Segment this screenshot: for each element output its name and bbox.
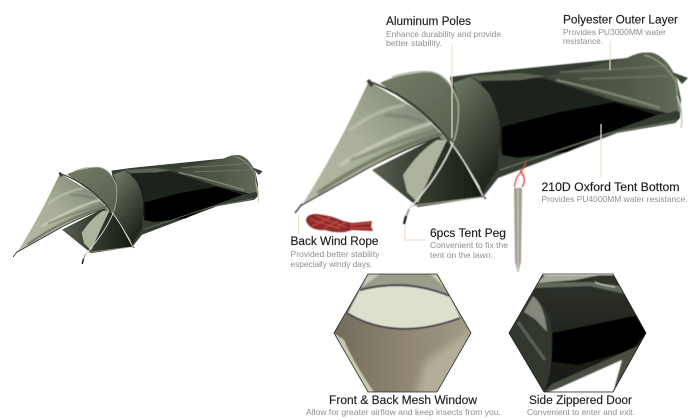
leader line: back wind rope [298, 215, 300, 235]
icon: tent peg with red cord [514, 163, 526, 273]
callout: tent peg: tent on the lawn. [430, 250, 493, 260]
leader line: tent peg [405, 226, 426, 240]
hexagon outline: mesh window [334, 274, 471, 392]
large tent photo [295, 53, 688, 224]
callout: polyester outer layer: Provides PU3000MM water [563, 27, 666, 37]
callout: back wind rope: Provided better stability [290, 249, 380, 259]
hexagon photo: mesh window [334, 274, 470, 392]
callout: polyester outer layer: resistance. [563, 36, 603, 46]
leader line: aluminum poles [451, 44, 453, 138]
caption: side door: Side Zippered Door [529, 395, 632, 407]
hexagon photo: side door [510, 274, 646, 392]
callout: tent peg: Convenient to fix the [430, 240, 508, 250]
leader line: polyester outer layer [609, 41, 611, 70]
callout: back wind rope: especially windy days. [290, 259, 372, 269]
leader line: oxford tent bottom [600, 124, 602, 177]
callout: polyester outer layer [563, 14, 678, 46]
caption: mesh window: Front & Back Mesh Window [329, 395, 478, 407]
callout: 210D oxford tent bottom: Provides PU4000MM water resistance. [542, 194, 688, 204]
callout: 210D oxford tent bottom: 210D Oxford Tent Bottom [542, 182, 680, 194]
callout: tent peg [430, 228, 508, 260]
callout: back wind rope: Back Wind Rope [290, 236, 378, 248]
callout: aluminum poles: better stability. [386, 38, 442, 48]
callout: tent peg: 6pcs Tent Peg [430, 228, 506, 240]
caption: mesh window: Allow for greater airflow and keep insects from you. [306, 407, 501, 417]
callout: aluminum poles [386, 16, 501, 48]
caption: side door: Convenient to enter and exit. [527, 407, 635, 417]
callout: 210D oxford tent bottom [542, 182, 688, 204]
caption: mesh window [306, 395, 501, 417]
icon: red wind rope [306, 214, 373, 232]
callout: aluminum poles: Enhance durability and provide [386, 29, 501, 39]
callout: aluminum poles: Aluminum Poles [386, 16, 471, 28]
small tent photo [13, 155, 263, 264]
hexagon outline: side door [509, 274, 646, 392]
caption: side door [527, 395, 635, 417]
callout: polyester outer layer: Polyester Outer Layer [563, 14, 678, 26]
callout: back wind rope [290, 236, 380, 269]
